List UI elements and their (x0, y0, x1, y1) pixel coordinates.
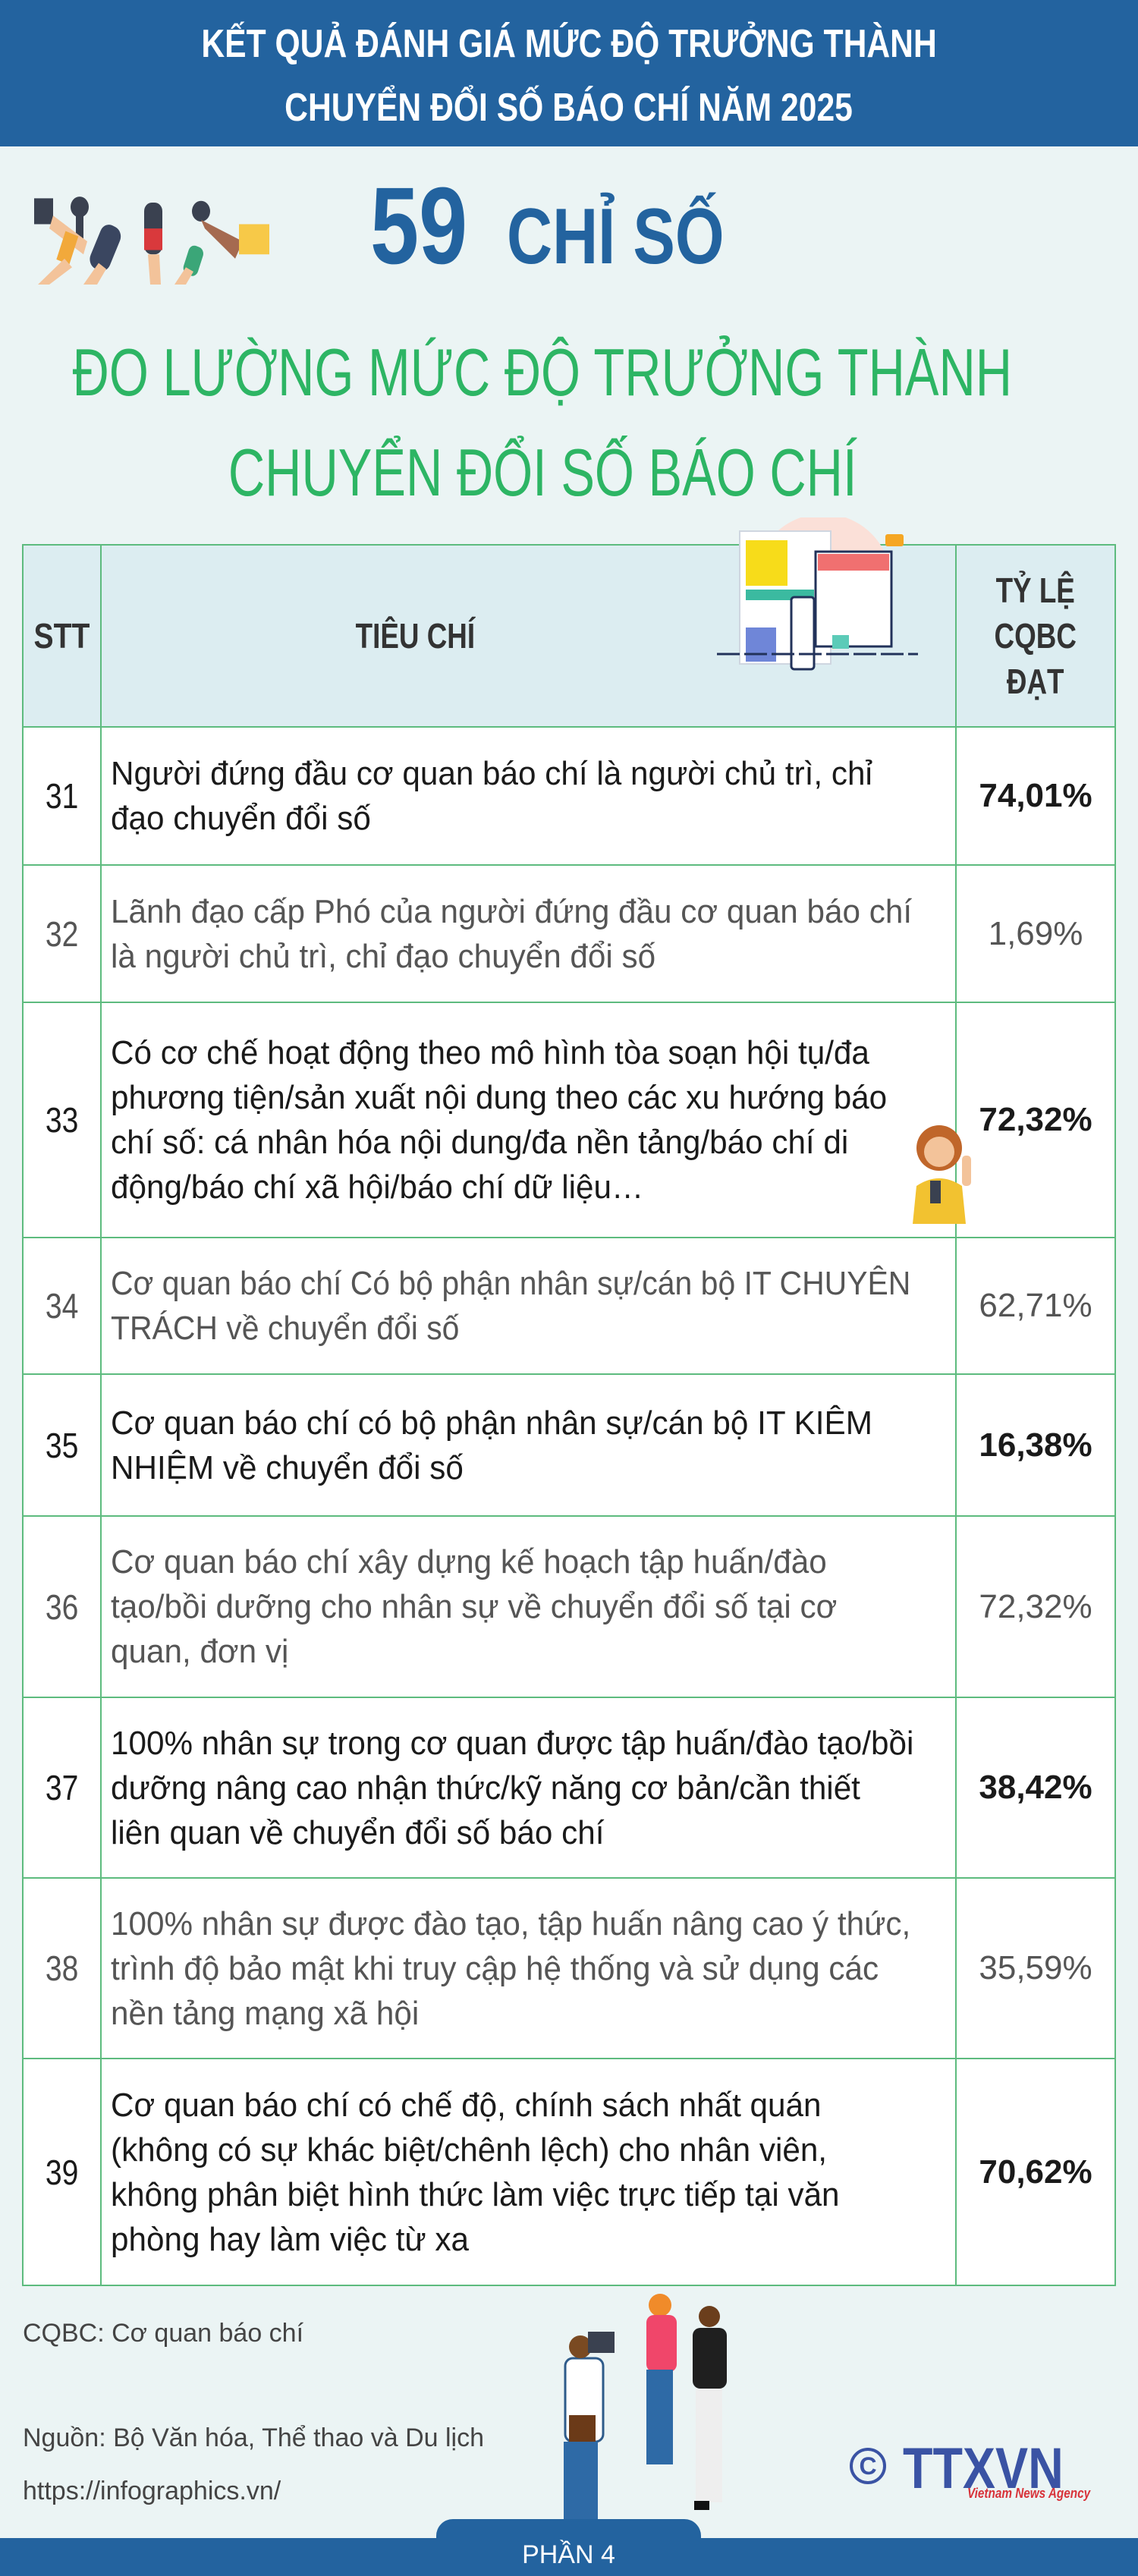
row 34 (22, 1238, 1116, 1375)
row 35 (22, 1375, 1116, 1517)
row 33: phương tiện/sản xuất nội dung theo các xu hướng báo (111, 1079, 887, 1116)
header band: CHUYỂN ĐỔI SỐ BÁO CHÍ NĂM 2025 (285, 86, 853, 130)
row 37: 38,42% (979, 1769, 1092, 1806)
row 38: trình độ bảo mật khi truy cập hệ thống và sử dụng các (111, 1950, 879, 1986)
subtitle green: CHUYỂN ĐỔI SỐ BÁO CHÍ (228, 435, 857, 510)
source: https://infographics.vn/ (23, 2477, 281, 2505)
row 33: 72,32% (979, 1101, 1092, 1138)
header band: KẾT QUẢ ĐÁNH GIÁ MỨC ĐỘ TRƯỞNG THÀNH (201, 22, 937, 66)
logo: TTXVN: TTXVN (903, 2436, 1064, 2501)
tab: phần 4: PHẦN 4 (522, 2540, 615, 2569)
row 31: 31 (46, 776, 78, 816)
row 36: 72,32% (979, 1587, 1092, 1625)
row 37 (22, 1698, 1116, 1879)
bottom bar (0, 2538, 1138, 2576)
row 33: động/báo chí xã hội/báo chí dữ liệu… (111, 1168, 643, 1206)
row 37: 100% nhân sự trong cơ quan được tập huấn/đào tạo/bồi (111, 1724, 913, 1762)
icon: reporter woman (913, 1125, 971, 1224)
row 33 (22, 1003, 1116, 1238)
row 35: 35 (46, 1425, 78, 1464)
row 31 (22, 728, 1116, 866)
headline: 59 chỉ số (370, 165, 725, 287)
row 33: chí số: cá nhân hóa nội dung/đa nền tảng/báo chí di (111, 1124, 848, 1161)
row 35: NHIỆM về chuyển đổi số (111, 1449, 464, 1486)
row 39: (không có sự khác biệt/chênh lệch) cho nhân viên, (111, 2131, 827, 2169)
source: Nguồn: Bộ Văn hóa, Thể thao và Du lịch (23, 2423, 484, 2452)
tab: phần 4 (436, 2519, 701, 2576)
footnote: CQBC: Cơ quan báo chí (23, 2319, 303, 2348)
row 38: 35,59% (979, 1949, 1092, 1986)
table header (22, 544, 1116, 728)
row 31: Người đứng đầu cơ quan báo chí là người chủ trì, chỉ (111, 755, 872, 792)
row 36: Cơ quan báo chí xây dựng kế hoạch tập huấn/đào (111, 1543, 827, 1581)
table header: ĐẠT (1007, 662, 1064, 701)
row 36: 36 (46, 1587, 78, 1627)
row 33: Có cơ chế hoạt động theo mô hình tòa soạn hội tụ/đa (111, 1034, 869, 1071)
row 34: TRÁCH về chuyển đổi số (111, 1310, 459, 1347)
row 39: không phân biệt hình thức làm việc trực tiếp tại văn (111, 2176, 840, 2213)
table header: TỶ LỆ (996, 571, 1075, 610)
logo: TTXVN: C (859, 2452, 877, 2480)
row 39: 39 (46, 2152, 78, 2191)
row 34: 34 (46, 1286, 78, 1326)
header band (0, 0, 1138, 146)
row 36: tạo/bồi dưỡng cho nhân sự về chuyển đổi số tại cơ (111, 1588, 837, 1625)
row 34: Cơ quan báo chí Có bộ phận nhân sự/cán bộ IT CHUYÊN (111, 1265, 910, 1302)
table header: STT (34, 616, 90, 656)
row 39 (22, 2059, 1116, 2286)
row 32: là người chủ trì, chỉ đạo chuyển đổi số (111, 938, 655, 974)
headline: 59 chỉ số: 59 (370, 165, 467, 287)
row 38: nền tảng mạng xã hội (111, 1994, 419, 2032)
row 36: quan, đơn vị (111, 1633, 288, 1670)
row 39: Cơ quan báo chí có chế độ, chính sách nhất quán (111, 2087, 822, 2123)
row 35: 16,38% (979, 1426, 1092, 1463)
row 31: 74,01% (979, 777, 1092, 814)
row 37: liên quan về chuyển đổi số báo chí (111, 1813, 605, 1851)
row 32: 32 (46, 914, 78, 953)
subtitle green: ĐO LƯỜNG MỨC ĐỘ TRƯỞNG THÀNH (73, 335, 1012, 410)
headline: 59 chỉ số: CHỈ SỐ (507, 193, 725, 281)
row 32: 1,69% (989, 915, 1083, 951)
row 36 (22, 1517, 1116, 1698)
logo: TTXVN: Vietnam News Agency (967, 2486, 1090, 2501)
row 39: 70,62% (979, 2153, 1092, 2190)
subtitle green (73, 335, 1012, 510)
row 38: 38 (46, 1949, 78, 1988)
illustration: reporters (564, 2294, 727, 2519)
row 35: Cơ quan báo chí có bộ phận nhân sự/cán bộ IT KIÊM (111, 1404, 872, 1442)
logo: TTXVN (850, 2436, 1091, 2501)
table header: TIÊU CHÍ (356, 616, 475, 656)
icon: microphones (34, 197, 269, 285)
icon: devices (717, 517, 918, 671)
row 31: đạo chuyển đổi số (111, 800, 371, 837)
row 37: dưỡng nâng cao nhận thức/kỹ năng cơ bản/cần thiết (111, 1769, 860, 1806)
source (23, 2423, 484, 2505)
row 34: 62,71% (979, 1287, 1092, 1324)
table header: CQBC (995, 616, 1077, 656)
row 38 (22, 1879, 1116, 2059)
row 38: 100% nhân sự được đào tạo, tập huấn nâng cao ý thức, (111, 1904, 910, 1942)
row 32 (22, 866, 1116, 1003)
row 33: 33 (46, 1100, 78, 1140)
row 37: 37 (46, 1768, 78, 1807)
row 39: phòng hay làm việc từ xa (111, 2220, 469, 2258)
row 32: Lãnh đạo cấp Phó của người đứng đầu cơ quan báo chí (111, 892, 912, 930)
